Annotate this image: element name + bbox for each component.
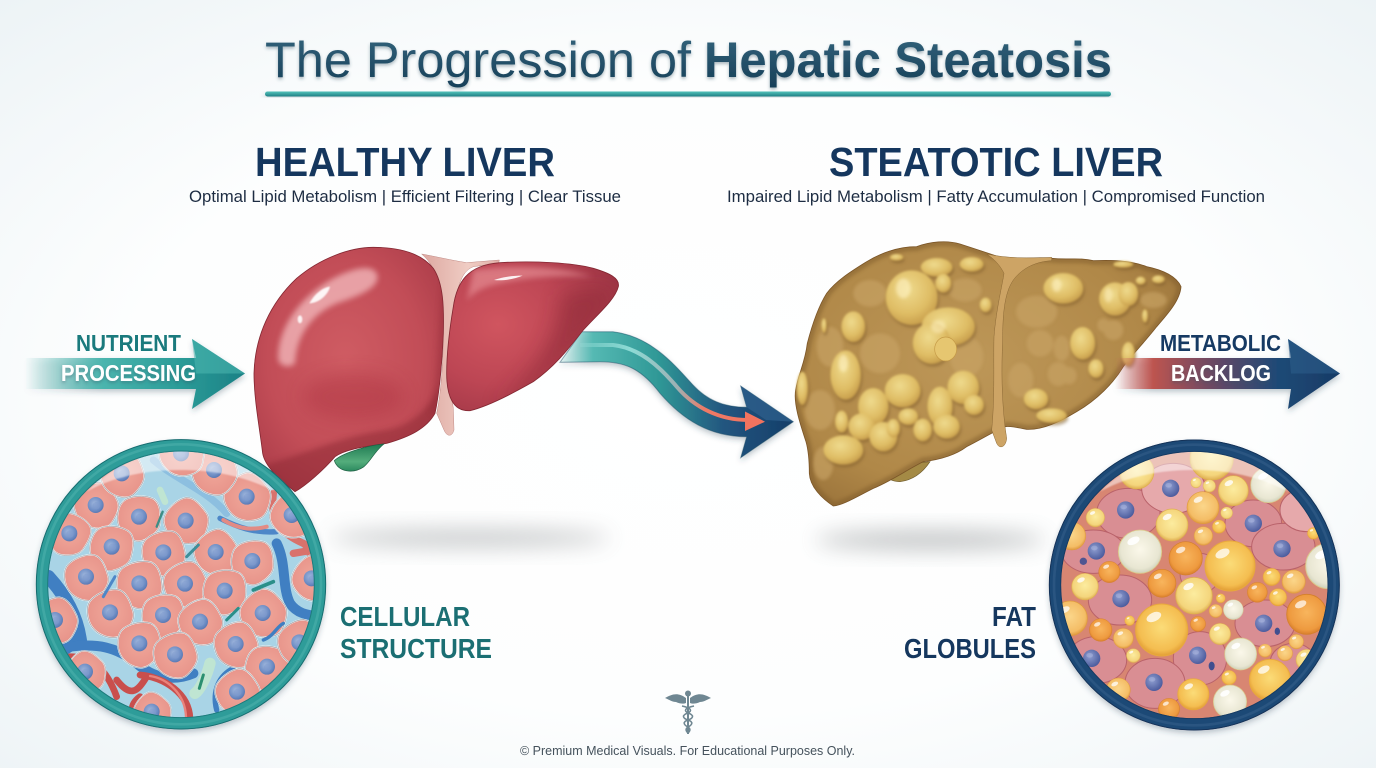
icon: caduceus bbox=[665, 690, 711, 734]
subheading: steatotic liver: Impaired Lipid Metabolism | Fatty Accumulation | Compromised Function bbox=[727, 187, 1265, 206]
hepatocytes bbox=[49, 452, 314, 717]
surface shading and mottling bbox=[795, 242, 1181, 506]
sinusoids bbox=[48, 460, 320, 710]
channels between cells bbox=[103, 512, 283, 688]
label: fat globules: GLOBULES bbox=[904, 633, 1036, 664]
title: The Progression of bbox=[265, 32, 691, 88]
gallbladder bbox=[882, 462, 930, 482]
pink hepatocytes bbox=[1062, 463, 1333, 708]
arrow head facet bbox=[741, 386, 793, 422]
footer credit: © Premium Medical Visuals. For Educational Purposes Only. bbox=[520, 744, 855, 758]
lens ring bbox=[36, 440, 326, 729]
liver body bbox=[795, 242, 1181, 506]
arrow: curved flow from healthy to steatotic bbox=[560, 332, 793, 458]
arrow head facet bbox=[192, 339, 245, 374]
vessels bbox=[70, 493, 313, 723]
title bbox=[265, 32, 1112, 88]
label: metabolic: METABOLIC bbox=[1160, 330, 1281, 356]
left lobe bbox=[254, 247, 457, 500]
label: cellular structure bbox=[340, 601, 492, 664]
magnifier: healthy cells bbox=[27, 430, 336, 731]
title: Hepatic Steatosis bbox=[704, 32, 1112, 88]
globules bbox=[1062, 452, 1328, 717]
label: nutrient: NUTRIENT bbox=[76, 330, 181, 356]
right lobe bbox=[447, 262, 619, 411]
label: cellular structure: STRUCTURE bbox=[340, 633, 492, 664]
label: fat globules bbox=[904, 601, 1036, 664]
healthy liver bbox=[254, 247, 619, 500]
nuclei bbox=[47, 445, 320, 720]
title underline bbox=[265, 92, 1111, 96]
gallbladder bbox=[334, 444, 384, 471]
heading: steatotic liver: STEATOTIC LIVER bbox=[829, 139, 1163, 185]
arrow: nutrient processing bbox=[25, 330, 245, 409]
liver ground shadows bbox=[330, 529, 1045, 549]
glass glare bbox=[87, 450, 275, 492]
fat deposits bbox=[797, 254, 1166, 467]
label: cellular structure: CELLULAR bbox=[340, 601, 470, 632]
arrow stripe bbox=[580, 345, 748, 420]
steatotic liver bbox=[795, 242, 1181, 506]
arrow head facet bbox=[1288, 339, 1340, 374]
nuclei bbox=[1080, 480, 1291, 691]
magnifier: fat globules bbox=[1049, 437, 1351, 730]
label: fat globules: FAT bbox=[992, 601, 1036, 632]
lens ring bbox=[1049, 440, 1339, 730]
heading: healthy liver: HEALTHY LIVER bbox=[255, 139, 555, 185]
ligament bbox=[422, 254, 499, 435]
fissure band bbox=[987, 254, 1052, 447]
subheading: healthy liver: Optimal Lipid Metabolism | Efficient Filtering | Clear Tissue bbox=[189, 187, 621, 206]
label: processing: PROCESSING bbox=[61, 360, 196, 386]
glass glare bbox=[1100, 450, 1288, 492]
arrow stripe head bbox=[745, 412, 765, 431]
label: backlog: BACKLOG bbox=[1171, 360, 1271, 386]
arrow: metabolic backlog bbox=[1115, 330, 1340, 409]
